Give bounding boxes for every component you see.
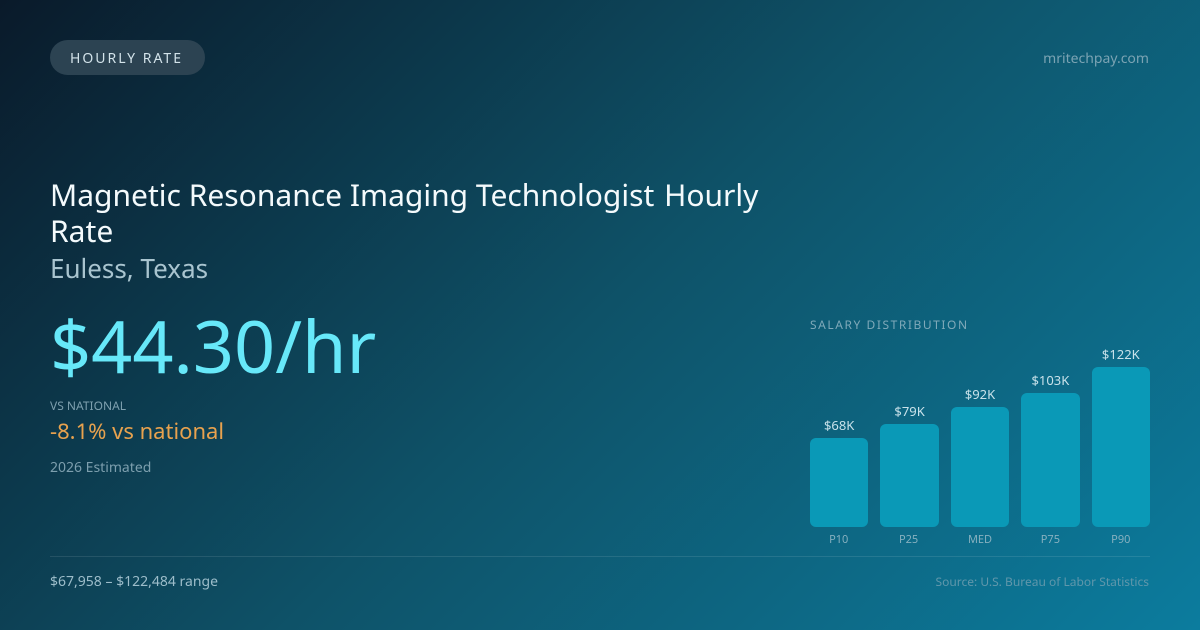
bar P25	[880, 424, 939, 527]
salary range: $67,958 – $122,484 range	[50, 572, 218, 591]
badge: hourly rate: HOURLY RATE	[70, 49, 183, 68]
label MED: MED	[968, 532, 992, 547]
subtitle: location: Euless, Texas	[50, 250, 208, 286]
label P25: P25	[899, 532, 918, 547]
bar MED	[951, 407, 1009, 527]
chart heading: salary distribution: SALARY DISTRIBUTION	[810, 316, 969, 333]
title: Magnetic Resonance Imaging Technologist Hourly Rate	[50, 174, 758, 251]
value P75: $103K	[1031, 371, 1069, 389]
site domain: mritechpay.com	[1043, 49, 1149, 68]
label P90: P90	[1111, 532, 1130, 547]
bar P90	[1092, 367, 1150, 527]
estimate note: 2026 Estimated	[50, 458, 151, 477]
value P10: $68K	[824, 416, 854, 434]
comparison value: -8.1% vs national	[50, 416, 224, 446]
value MED: $92K	[965, 385, 995, 403]
bar P75	[1021, 393, 1080, 527]
label P75: P75	[1041, 532, 1060, 547]
value P90: $122K	[1102, 345, 1140, 363]
badge: hourly rate	[50, 40, 205, 75]
value P25: $79K	[894, 402, 925, 420]
bar P10	[810, 438, 868, 527]
source: Source: U.S. Bureau of Labor Statistics	[936, 573, 1149, 590]
label P10: P10	[829, 532, 848, 547]
comparison label: VS NATIONAL	[50, 397, 126, 414]
hourly rate value: $44.30/hr	[50, 297, 376, 395]
